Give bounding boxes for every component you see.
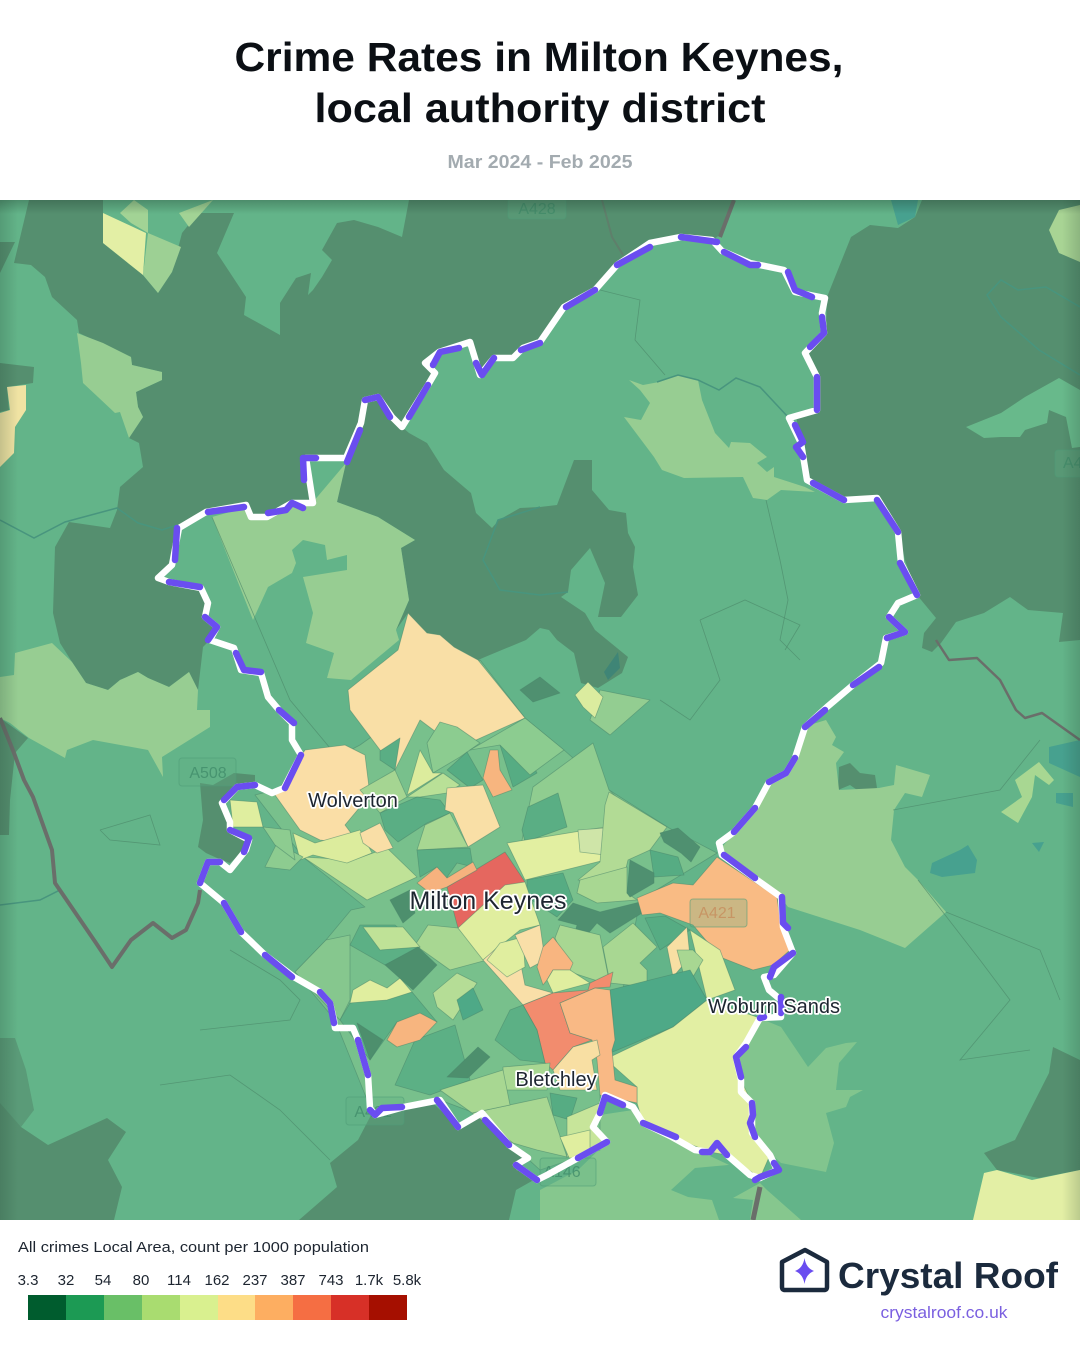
icon: Crystal Roof house logo: [782, 1250, 827, 1290]
road and river lines: [0, 280, 1080, 1160]
legend scale: 32: [58, 1272, 74, 1289]
border lines: [0, 200, 1080, 1220]
website link text: crystalroof.co.uk: [880, 1303, 1008, 1322]
brand name: Crystal Roof: [838, 1255, 1059, 1296]
place labels: Bletchley: [515, 1069, 597, 1091]
choropleth map: [0, 197, 1080, 1220]
place labels: Wolverton: [308, 790, 398, 812]
title: Crime Rates in Milton Keynes,: [234, 34, 843, 80]
legend scale: 162: [204, 1272, 230, 1289]
outlying pale areas: [0, 213, 1080, 1220]
road shields: A421: [698, 905, 736, 922]
legend scale: 1.7k: [355, 1272, 384, 1289]
legend title: All crimes Local Area, count per 1000 population: [18, 1239, 369, 1256]
water patches: [604, 200, 1080, 877]
Milton Keynes urban areas: [230, 613, 790, 1178]
road shields: A428: [518, 201, 556, 218]
legend scale: 5.8k: [393, 1272, 422, 1289]
place labels: [308, 790, 840, 1091]
road shields: [179, 197, 1080, 1186]
date range subtitle: Mar 2024 - Feb 2025: [448, 152, 632, 172]
legend scale: 3.3: [18, 1272, 38, 1289]
road shields: A508: [189, 765, 227, 782]
legend scale: 54: [95, 1272, 111, 1289]
legend scale: 743: [318, 1272, 344, 1289]
legend scale: 237: [242, 1272, 268, 1289]
legend scale: 114: [167, 1272, 191, 1289]
outlying mid-light areas: [0, 200, 1080, 1220]
legend scale: [18, 1272, 422, 1320]
place labels: Milton Keynes: [409, 887, 567, 915]
legend scale: 80: [133, 1272, 149, 1289]
outlying low crime areas: [0, 200, 1080, 1220]
title: local authority district: [314, 85, 766, 131]
map edge shadow: [0, 200, 1080, 1220]
district boundary: [158, 237, 917, 1180]
legend scale: 387: [280, 1272, 306, 1289]
title: [234, 34, 843, 131]
road shields: A421: [354, 1104, 392, 1121]
place labels: Woburn Sands: [708, 996, 840, 1018]
road shields: A146: [543, 1164, 581, 1181]
